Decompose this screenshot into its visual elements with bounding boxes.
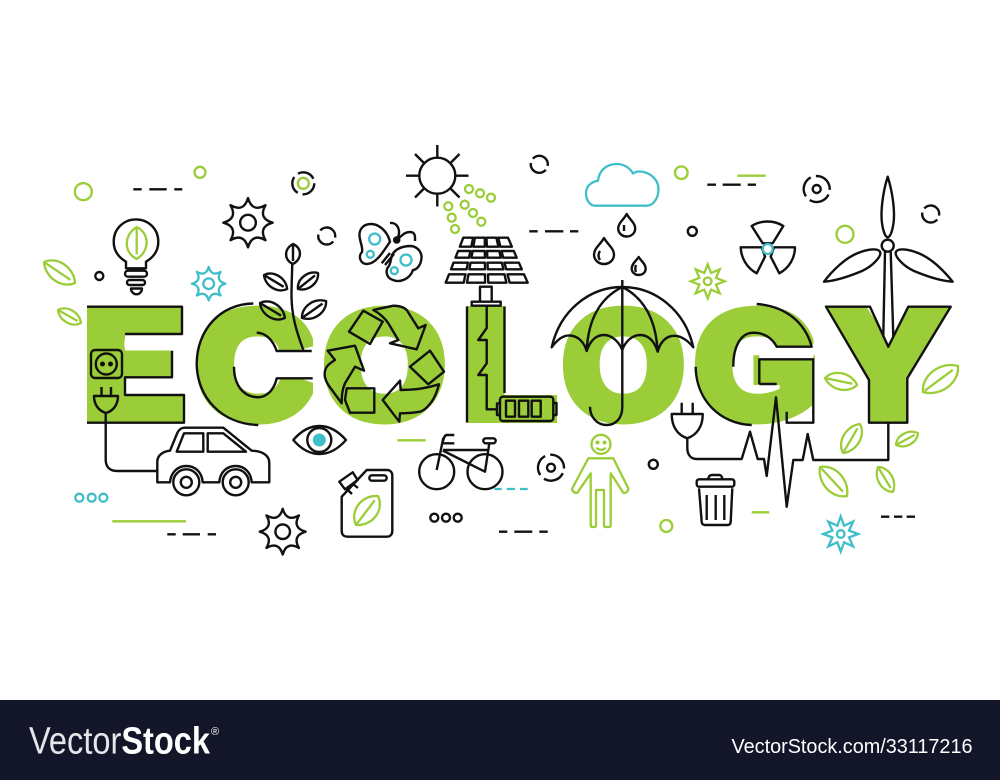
icon: plant sprout <box>256 244 330 350</box>
icon: green star <box>691 264 725 298</box>
icon: trash can <box>697 475 734 525</box>
icon: cloud <box>586 164 658 206</box>
title: ECOLOGY <box>87 306 948 424</box>
icon: sun <box>406 145 468 206</box>
dashed ring icons <box>292 152 943 485</box>
letter Y outline <box>826 307 951 423</box>
letter L outline with crack and battery <box>467 306 556 422</box>
icon: light bulb with leaf <box>114 219 158 294</box>
icon: butterfly <box>359 223 422 281</box>
footer logo: VectorStock: VectorStock <box>29 720 211 762</box>
title: ECOLOGY: C <box>197 283 312 448</box>
icon: gear bottom <box>260 509 306 555</box>
green leaves <box>39 254 964 503</box>
icon: umbrella <box>552 280 693 425</box>
icon: recycling arrows <box>325 306 444 422</box>
icon: solar panel <box>446 238 528 306</box>
title: ECOLOGY: O <box>325 282 444 447</box>
icon: plug with heartbeat line <box>672 397 888 507</box>
letter G outline <box>696 304 813 425</box>
green sun-ray dots <box>444 185 495 233</box>
icon: plug with cable to car <box>94 387 157 471</box>
icon: bicycle <box>419 435 502 489</box>
icon: person <box>572 435 628 527</box>
title: ECOLOGY: E <box>83 282 185 448</box>
icon: teal star <box>823 516 858 552</box>
title: ECOLOGY: L <box>464 283 555 448</box>
footer bar <box>0 700 1000 780</box>
title: ECOLOGY: O <box>564 282 683 447</box>
icon: electric car <box>157 428 269 495</box>
letter C outline <box>197 304 313 425</box>
icon: fuel canister <box>339 470 392 537</box>
title: ECOLOGY: G <box>696 283 817 448</box>
small circles <box>75 166 854 532</box>
footer registered mark: ® <box>211 726 219 738</box>
title: ECOLOGY: Y <box>830 282 945 447</box>
dashes and short lines <box>112 176 915 534</box>
icon: radiation symbol <box>741 222 795 273</box>
icon: eye <box>293 426 346 454</box>
icon: teal gear <box>192 267 225 300</box>
letter E outline with socket and plug <box>87 307 184 471</box>
icon: power socket <box>91 350 122 378</box>
icon: wind turbine <box>824 177 953 337</box>
footer url: VectorStock.com/33117216 <box>732 736 972 758</box>
icon: battery <box>497 397 556 421</box>
icon: gear top <box>223 198 273 247</box>
icon: water drops <box>594 214 646 275</box>
